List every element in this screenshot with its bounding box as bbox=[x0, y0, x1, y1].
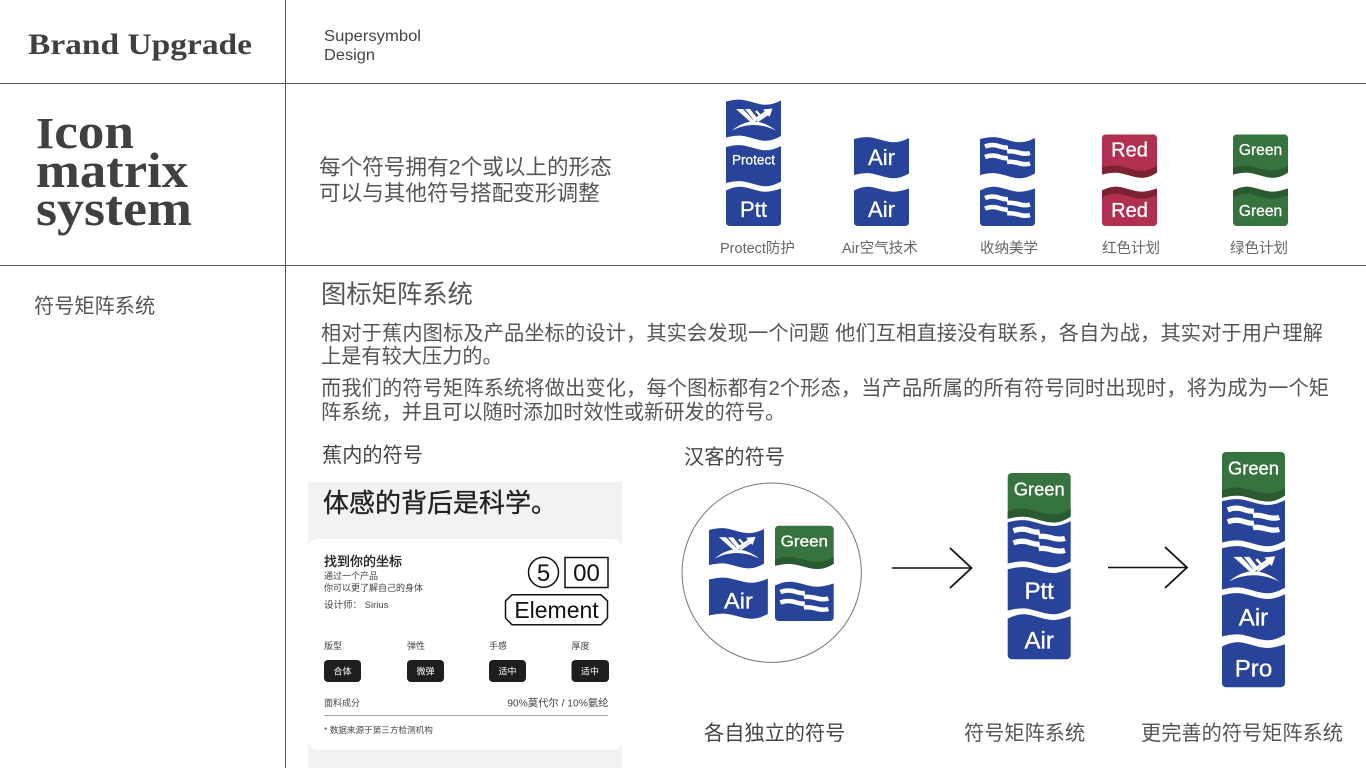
icon: Air flag bbox=[1222, 593, 1285, 640]
symbol set: Green bbox=[1230, 134, 1288, 257]
main heading bbox=[36, 103, 192, 236]
attribute: fit: 版型 bbox=[324, 640, 342, 651]
fabric composition: 90%莫代尔 / 10%氨纶 bbox=[507, 696, 608, 710]
icon: protect word flag: Protect bbox=[732, 152, 775, 168]
card description: 设计师： Sirius bbox=[324, 599, 389, 611]
body text: 相对于蕉内图标及产品坐标的设计，其实会发现一个问题 他们互相直接没有联系，各自为战，其实对于用户理解 bbox=[321, 322, 1323, 345]
footnote: * 数据来源于第三方检测机构 bbox=[324, 724, 433, 735]
attribute: fit bbox=[324, 640, 361, 682]
icon: Green head: Green bbox=[1228, 457, 1279, 478]
panel: separate symbols circle bbox=[682, 483, 861, 662]
section tag: Supersymbol bbox=[324, 28, 421, 45]
screenshot headline: 体感的背后是科学。 bbox=[323, 488, 557, 518]
panel: product label screenshot bbox=[308, 482, 622, 768]
section tag: Design bbox=[324, 47, 375, 64]
card title: 找到你的坐标 bbox=[324, 554, 402, 569]
symbol set: Protect bbox=[720, 100, 795, 257]
attribute: thickness bbox=[572, 640, 609, 682]
complete symbol matrix stack bbox=[1222, 452, 1285, 687]
icon: protect logo flag bbox=[726, 100, 781, 141]
arrow 1 bbox=[892, 548, 972, 588]
icon: Green head bbox=[1008, 473, 1071, 522]
body text: 而我们的符号矩阵系统将做出变化，每个图标都有2个形态，当产品所属的所有符号同时出现时，将为成为一个矩 bbox=[321, 377, 1329, 400]
left section label: 符号矩阵系统 bbox=[34, 295, 155, 318]
section tag bbox=[324, 28, 421, 64]
icon: protect word flag bbox=[726, 145, 781, 186]
caption: Air: Air空气技术 bbox=[842, 240, 918, 257]
white card bbox=[308, 539, 622, 750]
icon: storage base bbox=[775, 582, 834, 621]
attribute: fit: 合体 bbox=[333, 666, 352, 676]
icon: storage flag bbox=[1008, 520, 1071, 567]
icon: storage flag bbox=[980, 137, 1035, 178]
symbol set: storage bbox=[980, 137, 1038, 257]
icon: Green head bbox=[775, 526, 834, 569]
main heading: matrix bbox=[36, 142, 188, 198]
body text: 上是有较大压力的。 bbox=[321, 345, 503, 368]
icon: Air flag bbox=[709, 578, 768, 619]
icon: Ptt base bbox=[726, 187, 781, 226]
icon: Air flag: Air bbox=[724, 588, 753, 613]
badge: 5: 5 bbox=[537, 560, 550, 587]
body heading: 图标矩阵系统 bbox=[321, 281, 473, 309]
body text: 阵系统，并且可以随时添加时效性或新研发的符号。 bbox=[321, 401, 785, 424]
icon: Air base bbox=[1008, 614, 1071, 659]
body text bbox=[321, 322, 1329, 424]
icon: Air base: Air bbox=[1025, 627, 1054, 654]
icon: logo flag bbox=[1222, 546, 1285, 593]
symbol set: Red bbox=[1102, 134, 1160, 257]
attribute: elasticity: 弹性 bbox=[407, 640, 425, 651]
caption: symbol matrix: 符号矩阵系统 bbox=[964, 722, 1085, 745]
icon: Green head bbox=[1222, 452, 1285, 501]
caption: Red: 红色计划 bbox=[1102, 240, 1160, 257]
symbol matrix stack bbox=[1008, 473, 1071, 659]
caption: separate symbols: 各自独立的符号 bbox=[704, 722, 845, 745]
badge: 5 bbox=[528, 557, 558, 587]
icon: Green head: Green bbox=[1239, 142, 1282, 159]
attribute: feel: 适中 bbox=[498, 666, 517, 676]
icon: Green head: Green bbox=[781, 532, 828, 551]
intro text bbox=[319, 154, 612, 206]
caption: complete matrix: 更完善的符号矩阵系统 bbox=[1141, 722, 1343, 745]
main heading: Icon bbox=[36, 103, 134, 159]
icon: Red head: Red bbox=[1111, 140, 1148, 162]
badge: 00 bbox=[565, 558, 608, 588]
icon: Air flag: Air bbox=[868, 145, 895, 170]
badge: 00: 00 bbox=[573, 560, 600, 587]
icon: storage flag bbox=[1222, 499, 1285, 546]
symbol set: Air bbox=[842, 137, 918, 257]
subheading: Hanke symbols: 汉客的符号 bbox=[684, 446, 785, 469]
card description bbox=[324, 570, 423, 611]
arrow 2 bbox=[1108, 547, 1187, 588]
fabric composition bbox=[324, 696, 608, 710]
icon: Ptt base: Ptt bbox=[740, 197, 767, 222]
icon: Pro base: Pro bbox=[1235, 655, 1272, 682]
attribute: elasticity: 微弹 bbox=[416, 666, 435, 676]
attribute: thickness: 厚度 bbox=[572, 640, 590, 651]
icon: Red base: Red bbox=[1111, 200, 1148, 222]
caption: Green: 绿色计划 bbox=[1230, 240, 1288, 257]
icon: Pro base bbox=[1222, 642, 1285, 687]
subheading: Bananain symbols: 蕉内的符号 bbox=[322, 444, 423, 467]
badge: Element: Element bbox=[514, 597, 599, 623]
attribute: feel bbox=[489, 640, 526, 682]
icon: storage base bbox=[980, 187, 1035, 226]
icon: Ptt flag bbox=[1008, 567, 1071, 614]
fabric composition: 面料成分 bbox=[324, 697, 360, 708]
attribute: elasticity bbox=[407, 640, 444, 682]
caption: Protect: Protect防护 bbox=[720, 240, 795, 257]
icon: Ptt flag: Ptt bbox=[1024, 578, 1054, 605]
icon: Air flag: Air bbox=[1239, 605, 1268, 632]
icon: Air base: Air bbox=[868, 197, 895, 222]
main heading: system bbox=[36, 180, 192, 236]
intro text: 可以与其他符号搭配变形调整 bbox=[319, 180, 600, 206]
caption: storage: 收纳美学 bbox=[980, 240, 1038, 257]
attribute: thickness: 适中 bbox=[581, 666, 599, 676]
attribute: feel: 手感 bbox=[489, 640, 507, 651]
intro text: 每个符号拥有2个或以上的形态 bbox=[319, 154, 612, 180]
icon: Green head: Green bbox=[1014, 478, 1065, 499]
card description: 你可以更了解自己的身体 bbox=[324, 582, 423, 593]
brand title: Brand Upgrade bbox=[28, 28, 252, 61]
card description: 通过一个产品 bbox=[324, 570, 378, 581]
icon: logo flag bbox=[709, 528, 764, 568]
icon: Green base: Green bbox=[1239, 203, 1282, 220]
